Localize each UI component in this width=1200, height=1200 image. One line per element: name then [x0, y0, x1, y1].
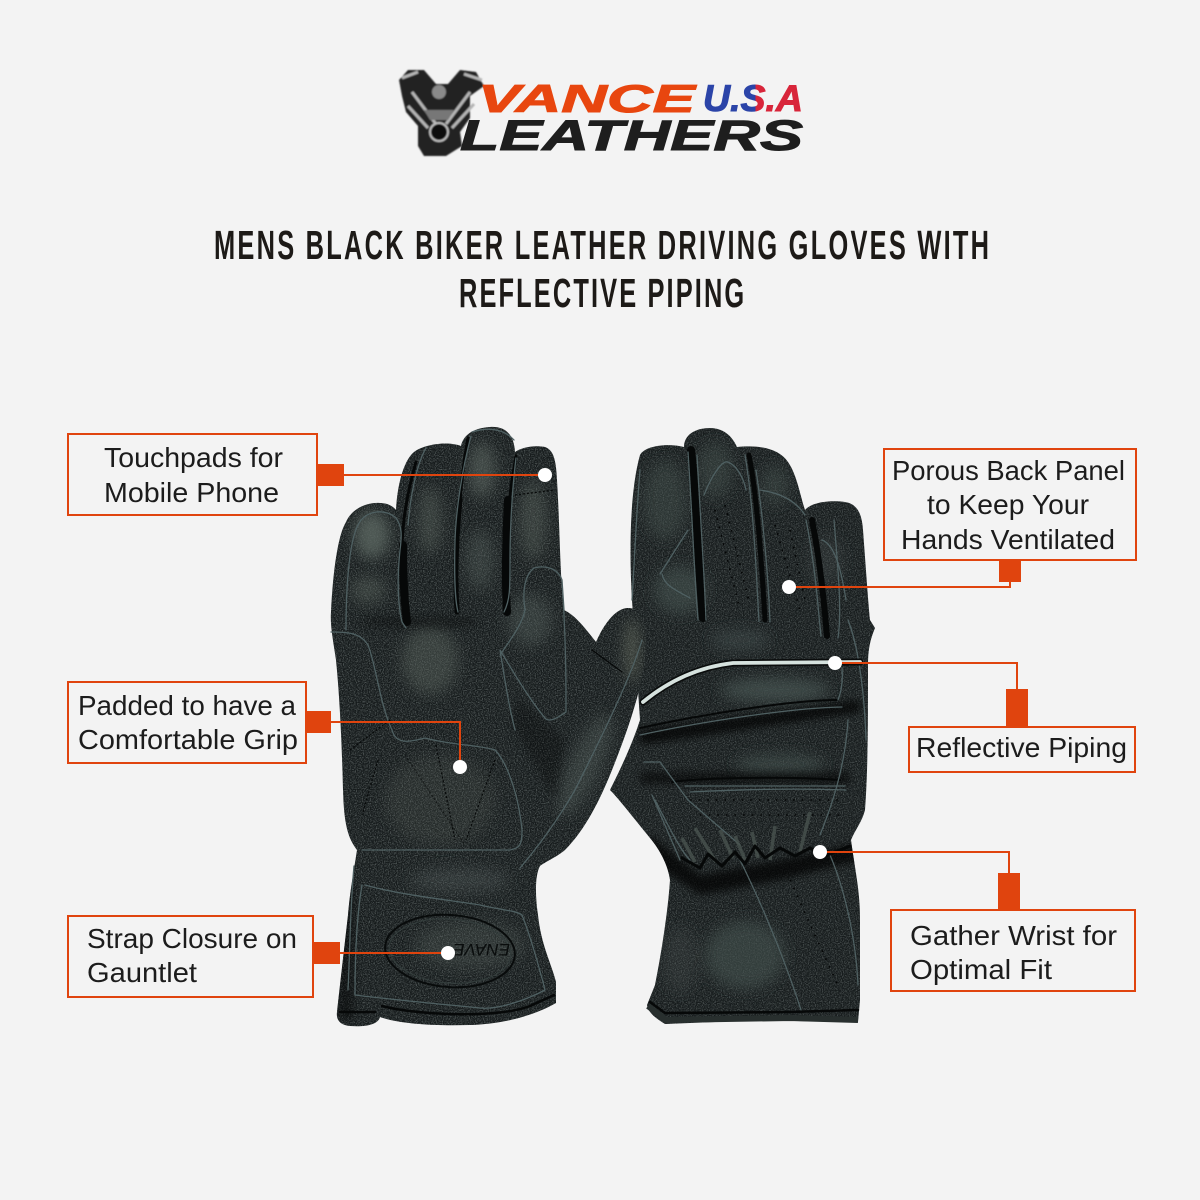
title: MENS BLACK BIKER LEATHER DRIVING GLOVES WITH: [214, 223, 989, 269]
label text: Touchpads for: [104, 442, 283, 473]
label text: Optimal Fit: [910, 954, 1052, 985]
callout: padded grip: [68, 682, 467, 774]
connector: [307, 711, 467, 774]
finger slits: [691, 450, 703, 618]
reflective piping strip: [643, 662, 860, 702]
left glove (palm): [320, 420, 650, 1040]
gather wrist: [682, 812, 810, 862]
perforations: [690, 505, 840, 990]
callout: touchpads for mobile phone: [68, 434, 552, 515]
label text: Hands Ventilated: [901, 524, 1115, 555]
palm pad stitching: [350, 490, 555, 840]
label text: Gather Wrist for: [910, 920, 1117, 951]
label box: [68, 916, 313, 997]
seams: [632, 452, 840, 638]
label box: [909, 727, 1135, 772]
callout: strap closure: [68, 916, 455, 997]
connector: [314, 942, 455, 964]
label text: Gauntlet: [87, 957, 197, 988]
label text: Mobile Phone: [104, 477, 279, 508]
title: REFLECTIVE PIPING: [459, 271, 744, 317]
cuff hem: [648, 1006, 858, 1020]
cuff hem: [340, 995, 554, 1014]
logo text: VANCE: VANCE: [478, 78, 697, 121]
logo: Vance USA Leathers: [399, 70, 803, 160]
right glove (back of hand): [610, 428, 875, 1024]
logo text: LEATHERS: LEATHERS: [460, 112, 803, 160]
callout: reflective piping: [828, 656, 1135, 772]
callout: gather wrist: [813, 845, 1135, 991]
connector: [782, 561, 1021, 594]
label text: Padded to have a: [78, 690, 296, 721]
callout: porous back panel: [782, 449, 1136, 594]
label text: Comfortable Grip: [78, 724, 298, 755]
connector: [828, 656, 1028, 726]
embossed strap logo: ENAVE: [453, 940, 510, 959]
connector: [318, 464, 552, 486]
label text: Porous Back Panel: [892, 455, 1125, 486]
label text: Strap Closure on: [87, 923, 297, 954]
label text: Reflective Piping: [916, 732, 1127, 763]
label box: [884, 449, 1136, 560]
logo text: U.S.A: U.S.A: [703, 78, 803, 119]
label box: [68, 434, 317, 515]
connector: [813, 845, 1020, 909]
icon: v-twin engine: [399, 70, 484, 156]
gauntlet strap: [348, 866, 545, 1008]
title: [214, 223, 989, 317]
label box: [68, 682, 306, 763]
label box: [891, 910, 1135, 991]
finger slits: [403, 545, 407, 622]
seams: [346, 429, 516, 630]
label text: to Keep Your: [927, 489, 1089, 520]
